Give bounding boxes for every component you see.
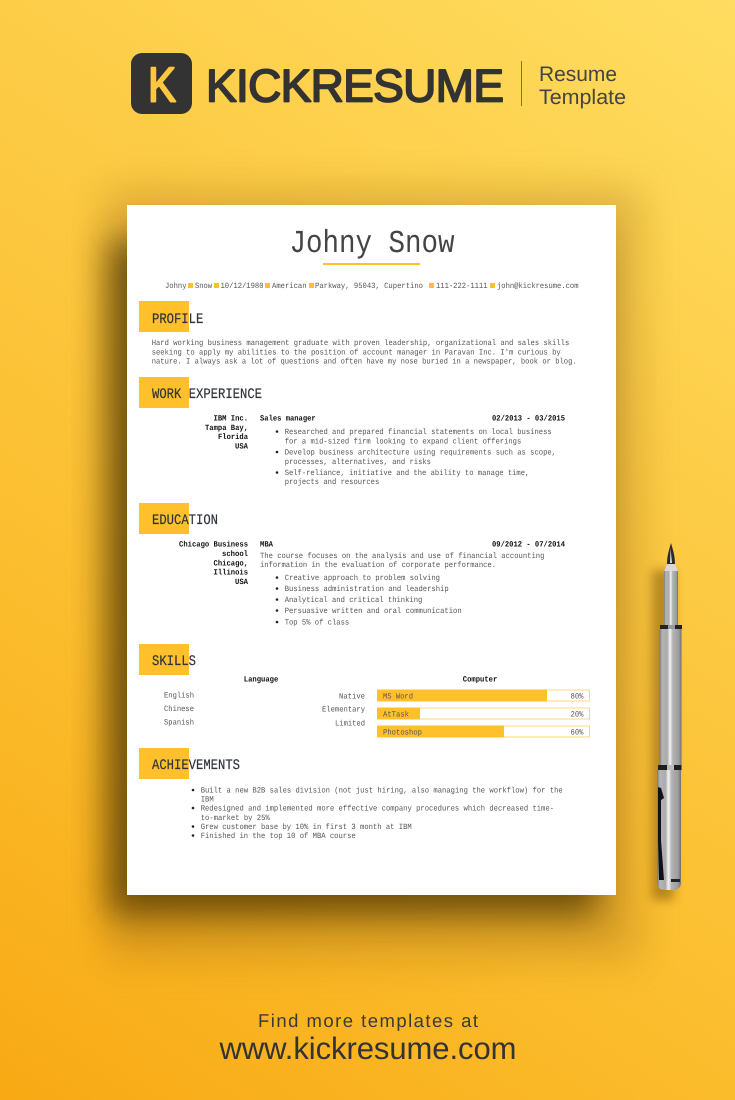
course description: [260, 552, 545, 570]
contact line: 10/12/1980: [220, 282, 264, 291]
school: USA: [235, 578, 248, 587]
education bullets: Persuasive written and oral communication: [285, 607, 462, 616]
heading: skills: [139, 644, 196, 675]
job bullets: for a mid-sized firm looking to expand client offerings: [285, 438, 521, 446]
subtitle: Resume Template: Resume: [539, 63, 617, 86]
achievements bullets: [192, 786, 563, 841]
paper shadow: soft haze: [105, 190, 640, 960]
footer call to action: [218, 1010, 516, 1066]
bar: AtTask 20%: [377, 708, 590, 720]
school: [179, 540, 248, 587]
bar: AtTask 20%: AtTask: [383, 710, 409, 720]
job bullets: projects and resources: [285, 478, 379, 487]
heading: education: [139, 503, 218, 534]
bar: MS Word 80%: MS Word: [383, 692, 413, 702]
bar: MS Word 80%: [377, 690, 590, 702]
school: Chicago Business: [179, 540, 248, 550]
achievements bullets: Redesigned and implemented more effective company procedures which decreased time-: [201, 804, 554, 814]
contact line: Snow: [195, 282, 212, 291]
profile text: seeking to apply my abilities to the position of account manager in Paravan Inc. I'm curious by: [152, 348, 561, 358]
heading: profile: PROFILE: [152, 312, 203, 328]
achievements bullets: Built a new B2B sales division (not just hiring, also managing the workflow) for the: [201, 786, 563, 796]
section: achievements: [139, 748, 563, 841]
language skills: Spanish: [164, 718, 194, 728]
section: skills: [139, 644, 590, 738]
employer: Florida: [218, 433, 248, 442]
education bullets: Business administration and leadership: [285, 585, 449, 594]
course description: The course focuses on the analysis and use of financial accounting: [260, 552, 545, 561]
language skills: Chinese: [164, 705, 194, 714]
education bullets: [276, 574, 462, 628]
subtitle: Resume Template: [521, 61, 626, 109]
language skills: [164, 676, 365, 728]
contact line: john@kickresume.com: [497, 282, 579, 291]
contact line: [165, 282, 579, 291]
employer: [205, 414, 248, 452]
icon: K badge: [131, 53, 192, 114]
job bullets: Self-reliance, initiative and the ability to manage time,: [285, 469, 529, 478]
panel: resume page: [127, 205, 616, 895]
degree and dates: MBA: [260, 540, 273, 550]
icon: silver pen: [652, 543, 682, 900]
employer: USA: [235, 442, 248, 452]
job bullets: processes, alternatives, and risks: [285, 458, 431, 467]
job bullets: [276, 428, 556, 487]
icon: K badge: K: [148, 58, 176, 112]
section: profile: [139, 301, 577, 366]
logo: Kickresume: [131, 53, 504, 114]
job title and dates: 02/2013 - 03/2015: [492, 414, 565, 424]
profile text: Hard working business management graduate with proven leadership, organizational and sales skills: [152, 339, 569, 348]
heading: education: EDUCATION: [152, 513, 218, 529]
language skills: Language: [244, 676, 278, 684]
bar: Photoshop 60%: 60%: [570, 728, 584, 738]
employer: IBM Inc.: [214, 414, 248, 424]
school: Chicago,: [214, 560, 248, 568]
paper shadow: dark core: [108, 240, 598, 915]
education bullets: Top 5% of class: [285, 618, 349, 628]
language skills: Elementary: [322, 706, 365, 714]
contact line: 111-222-1111: [436, 282, 488, 291]
language skills: Limited: [335, 720, 365, 728]
school: Illinois: [214, 568, 248, 578]
job title and dates: [260, 414, 565, 424]
wordmark: KICKRESUME: [206, 60, 504, 112]
section: education: [139, 503, 565, 628]
education bullets: Analytical and critical thinking: [285, 596, 422, 605]
degree and dates: 09/2012 - 07/2014: [492, 540, 565, 550]
resume name: Johny Snow: [290, 225, 454, 262]
heading: skills: SKILLS: [152, 654, 196, 670]
profile text: nature. I always ask a lot of questions and often have my nose buried in a newspaper, book or blog.: [152, 358, 577, 366]
achievements bullets: IBM: [201, 796, 214, 804]
degree and dates: [260, 540, 565, 550]
bar: AtTask 20%: 20%: [570, 710, 584, 720]
education bullets: Creative approach to problem solving: [285, 574, 440, 583]
footer call to action: Find more templates at: [258, 1010, 478, 1031]
profile text: [152, 339, 577, 366]
section: work experience: [139, 377, 565, 487]
school: school: [222, 550, 248, 559]
job bullets: Develop business architecture using requirements such as scope,: [285, 448, 556, 458]
heading: achievements: ACHIEVEMENTS: [152, 758, 240, 774]
course description: information in the evaluation of corporate performance.: [260, 561, 496, 570]
heading: achievements: [139, 748, 240, 779]
contact line: Parkway, 95043, Cupertino: [315, 282, 423, 291]
achievements bullets: Grew customer base by 10% in first 3 month at IBM: [201, 823, 412, 832]
subtitle: Resume Template: Template: [539, 86, 626, 109]
heading: work experience: WORK EXPERIENCE: [152, 387, 262, 403]
job title and dates: Sales manager: [260, 414, 316, 424]
contact line: American: [272, 282, 307, 291]
achievements bullets: to-market by 25%: [201, 814, 270, 823]
footer call to action: www.kickresume.com: [218, 1031, 516, 1066]
bar: MS Word 80%: 80%: [570, 692, 584, 702]
heading: work experience: [139, 377, 262, 408]
contact line: Johny: [165, 282, 187, 291]
heading: profile: [139, 301, 203, 332]
job bullets: Researched and prepared financial statements on local business: [285, 428, 552, 437]
achievements bullets: Finished in the top 10 of MBA course: [201, 832, 356, 841]
computer skills: [377, 676, 590, 738]
bar: Photoshop 60%: Photoshop: [383, 728, 422, 738]
bar: Photoshop 60%: [377, 726, 590, 738]
language skills: English: [164, 692, 194, 700]
language skills: Native: [339, 692, 365, 702]
employer: Tampa Bay,: [205, 424, 248, 433]
computer skills: Computer: [463, 676, 497, 684]
